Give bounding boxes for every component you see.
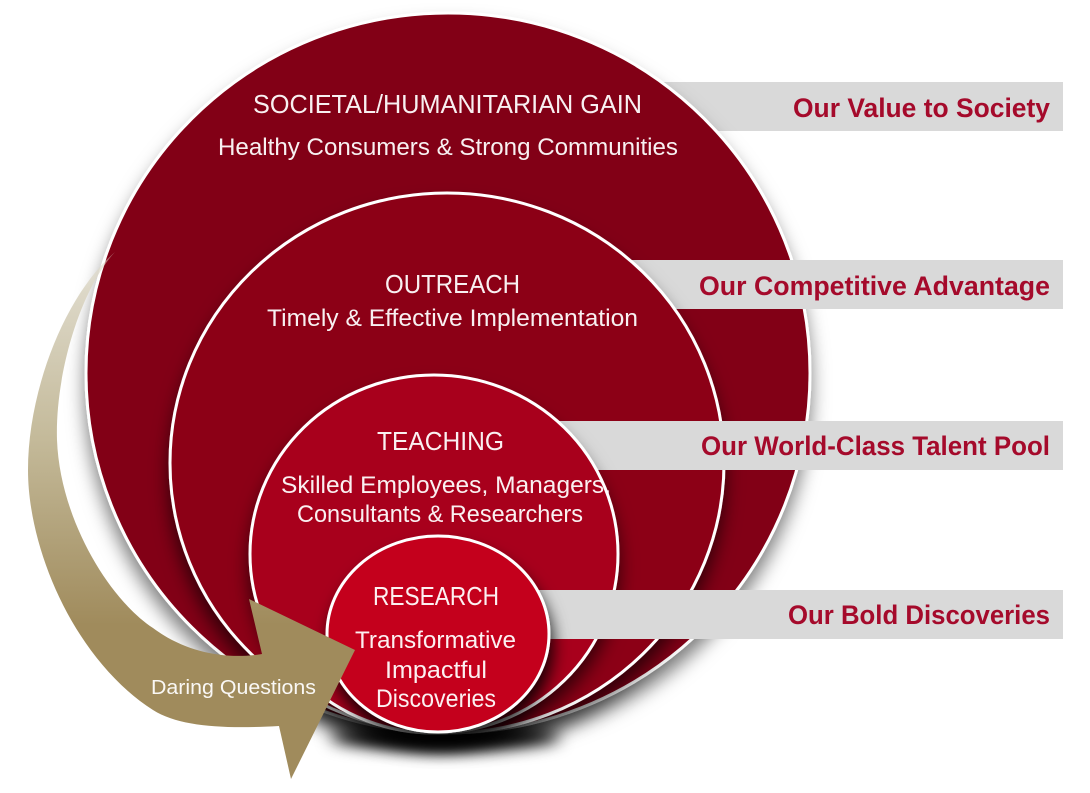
label: our world-class talent pool: Our World-Class Talent Pool bbox=[701, 431, 1050, 461]
heading: research: RESEARCH bbox=[373, 581, 499, 611]
text: research detail bbox=[355, 627, 516, 713]
circle: societal gain bbox=[86, 13, 810, 733]
heading: societal gain: SOCIETAL/HUMANITARIAN GAIN bbox=[253, 89, 642, 119]
label: our bold discoveries: Our Bold Discoveries bbox=[788, 600, 1050, 630]
label: our competitive advantage: Our Competitive Advantage bbox=[699, 271, 1050, 301]
arrow: daring questions: Daring Questions bbox=[151, 677, 316, 699]
arrow: daring questions bbox=[28, 252, 355, 779]
bar: our world-class talent pool bbox=[540, 421, 1063, 470]
bar: our bold discoveries bbox=[530, 590, 1063, 639]
bottom shadow bbox=[330, 725, 560, 749]
label: our value to society: Our Value to Society bbox=[793, 93, 1050, 123]
bar: our value to society bbox=[640, 82, 1063, 131]
text: teaching detail bbox=[281, 472, 611, 528]
circle: teaching bbox=[250, 375, 618, 733]
text: teaching detail: Skilled Employees, Managers, bbox=[281, 472, 611, 499]
text: research detail: Transformative bbox=[355, 627, 516, 654]
text: teaching detail: Consultants & Researchers bbox=[297, 501, 583, 528]
text: research detail: Discoveries bbox=[376, 685, 496, 713]
bar: our competitive advantage bbox=[600, 260, 1063, 309]
circle: outreach bbox=[170, 193, 724, 733]
text: societal gain detail: Healthy Consumers & Strong Communities bbox=[218, 134, 678, 161]
heading: outreach: OUTREACH bbox=[385, 269, 520, 299]
heading: teaching: TEACHING bbox=[377, 426, 504, 456]
text: outreach detail: Timely & Effective Implementation bbox=[267, 305, 638, 332]
circle: research bbox=[327, 536, 549, 732]
text: research detail: Impactful bbox=[385, 657, 487, 684]
